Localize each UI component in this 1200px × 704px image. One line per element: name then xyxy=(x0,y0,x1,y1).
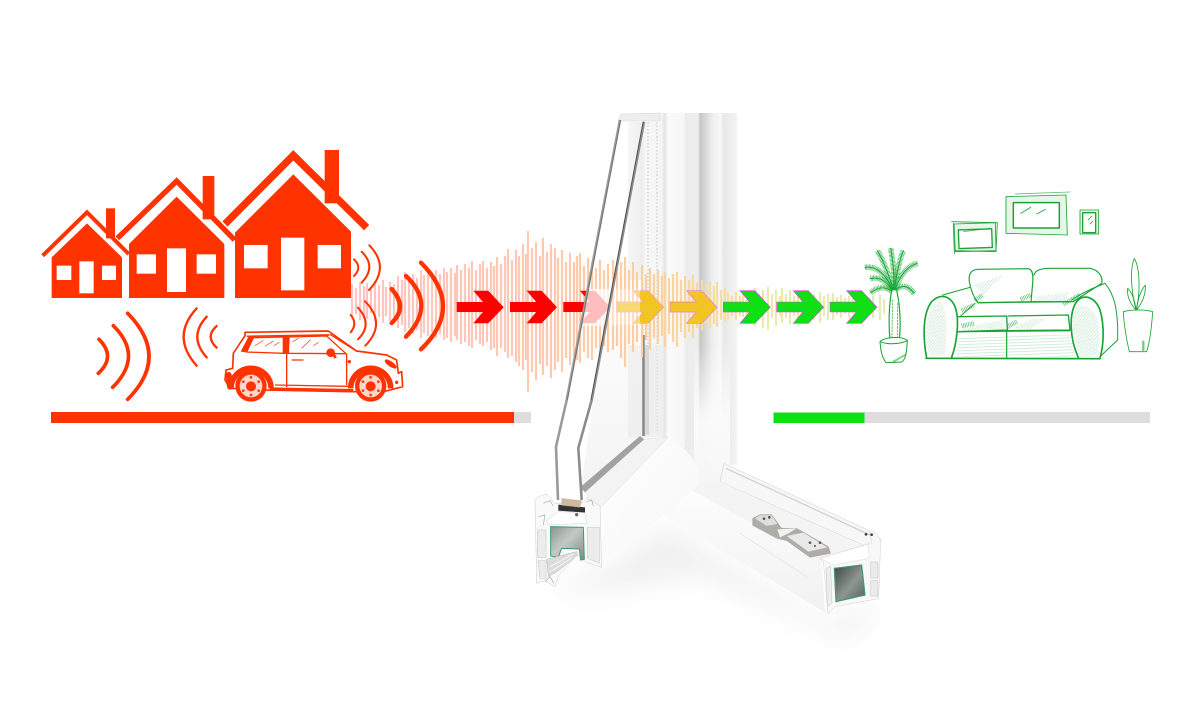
bar fill green xyxy=(774,412,864,423)
picture right xyxy=(1080,210,1099,234)
sill xyxy=(270,389,353,391)
section body xyxy=(535,494,602,587)
mirror xyxy=(326,348,337,359)
web under glazing xyxy=(547,512,587,525)
light band beside the seal xyxy=(645,345,649,435)
right rail bead line xyxy=(726,468,870,535)
quiet interior sketch xyxy=(865,192,1153,363)
arrow 5 yellow xyxy=(670,291,717,323)
car body xyxy=(225,331,403,392)
glass translucency over arrow 3 xyxy=(581,289,613,326)
glass pane 2 xyxy=(578,122,644,500)
chambers xyxy=(537,527,599,578)
front window xyxy=(288,336,346,354)
steel core xyxy=(551,527,584,560)
bar track grey xyxy=(864,412,1150,423)
top cap of the glazing xyxy=(618,113,660,121)
right rail front face xyxy=(663,490,825,612)
spacer dotted lines xyxy=(648,122,657,432)
arrow 6 green xyxy=(723,291,770,323)
house small xyxy=(43,208,129,298)
gasket dark top xyxy=(558,505,585,513)
glass translucency over arrow 4 xyxy=(612,289,640,325)
sound waveform xyxy=(352,231,884,392)
lower frame shade fade xyxy=(694,345,730,483)
house large xyxy=(225,150,367,298)
rails and sash drawn in crop coordinates xyxy=(580,436,882,612)
rear pillar xyxy=(241,337,253,352)
section body xyxy=(820,531,881,614)
rail lines xyxy=(550,554,573,572)
front arch xyxy=(351,368,391,388)
rear wheel xyxy=(235,370,267,402)
sound arcs right of houses, large xyxy=(392,263,443,349)
steel core xyxy=(834,565,865,602)
lower glazing band xyxy=(628,345,662,437)
front wheel xyxy=(355,370,386,402)
dark seal behind the glass xyxy=(642,335,645,436)
noise level bar outside xyxy=(51,412,531,423)
rail screws xyxy=(865,533,873,536)
left web xyxy=(826,566,832,607)
seal clips xyxy=(538,500,593,583)
vertical frame upper glazing side xyxy=(628,122,661,465)
indicator and bumper dots xyxy=(348,360,398,384)
picture left xyxy=(952,222,997,254)
right rail inner strip xyxy=(720,463,882,547)
glass pane 1 xyxy=(556,120,621,500)
hardware and right end cross-section xyxy=(753,515,881,614)
floor shadow xyxy=(540,525,880,640)
arrow 3 red xyxy=(563,291,610,323)
arrow 1 red xyxy=(457,291,504,323)
arrow 7 green xyxy=(777,291,824,323)
sound arcs left of road xyxy=(98,313,149,399)
grey glass seal strip xyxy=(580,436,644,492)
roof stripe xyxy=(247,335,329,336)
bar fill red xyxy=(51,412,514,423)
sound arcs behind car xyxy=(184,308,217,366)
window profile photo substitute xyxy=(535,113,882,640)
sofa xyxy=(924,268,1118,359)
section chambers xyxy=(871,562,878,596)
flow arrows xyxy=(457,291,877,323)
car xyxy=(225,331,403,402)
vertical frame profile xyxy=(660,113,738,465)
palm plant xyxy=(865,248,917,363)
noise level bar inside xyxy=(774,412,1150,423)
picture centre xyxy=(1006,192,1070,235)
arrow 2 red xyxy=(510,291,557,323)
rear bumper blob xyxy=(229,375,230,387)
arrow 8 green xyxy=(830,291,877,323)
sound arcs by large house xyxy=(351,245,380,346)
top ledge xyxy=(820,544,869,565)
spacer granules xyxy=(562,498,582,507)
bar track grey xyxy=(513,412,531,423)
noisy outside: houses, car and sound arcs xyxy=(43,150,443,399)
lower rail xyxy=(547,552,577,577)
hardware plate xyxy=(753,515,831,557)
glazing bead xyxy=(585,437,668,508)
headlight xyxy=(383,358,398,370)
door lines xyxy=(284,334,357,387)
house medium xyxy=(117,176,235,298)
rear arch xyxy=(231,368,271,388)
rear window xyxy=(247,337,283,353)
left sash front face xyxy=(600,437,699,567)
right rail top surface xyxy=(690,482,873,562)
right rail face crease xyxy=(740,533,807,577)
screw head xyxy=(575,513,578,516)
sill upper line xyxy=(275,385,348,386)
glass shade area xyxy=(581,280,643,487)
potted plant right xyxy=(1123,258,1153,352)
window glints xyxy=(255,338,319,348)
left end cross-section xyxy=(535,494,602,587)
arrow 4 yellow xyxy=(617,291,664,323)
